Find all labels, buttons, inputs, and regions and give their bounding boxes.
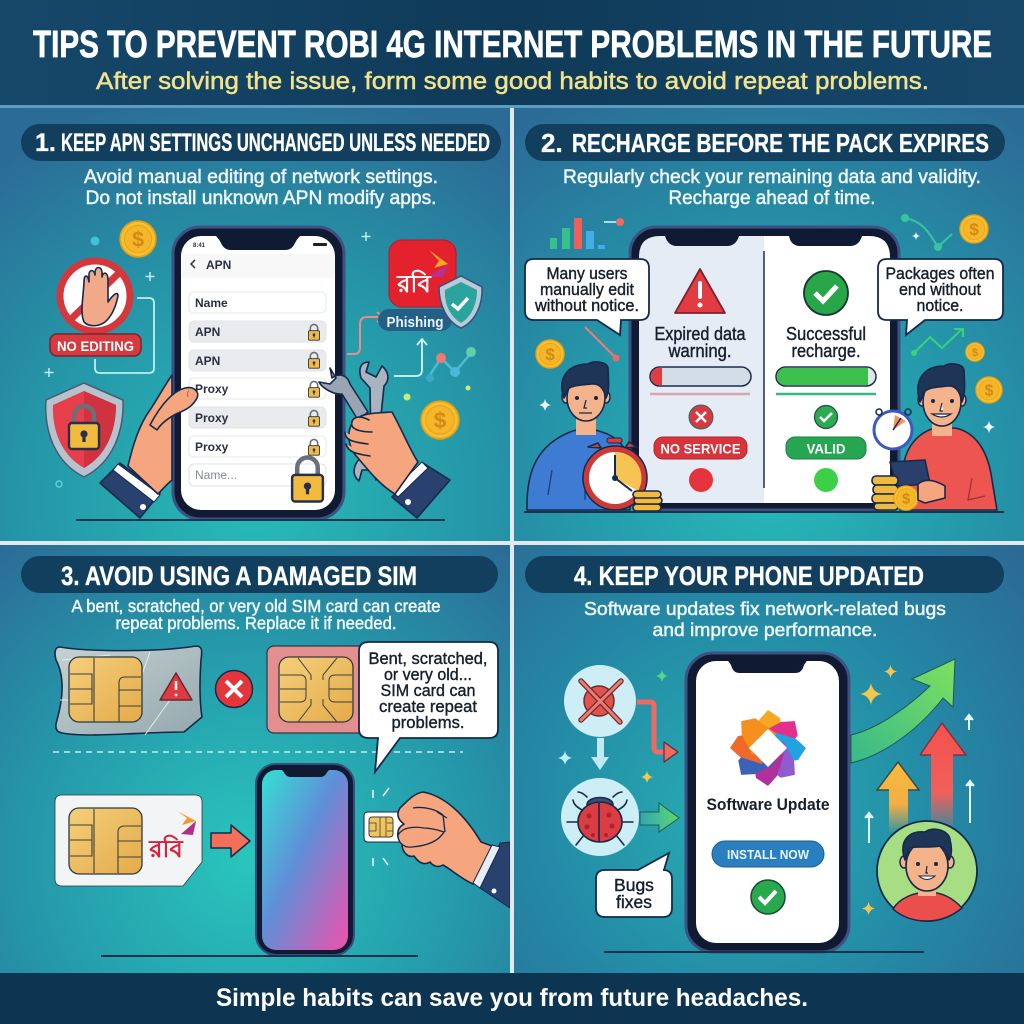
mini line chart [394,339,476,382]
icon: no editing hand [60,261,130,331]
description 3: A bent, scratched, or very old SIM card can create [72,596,440,616]
speech bubble left: without notice. [534,297,639,315]
icon: Robi app [389,240,456,307]
hand on tablet [918,480,945,503]
warning state [650,269,751,492]
success state: recharge. [792,341,860,361]
person left [527,362,630,510]
insertion ticks [373,788,389,866]
description 4: Software updates fix network-related bugs [584,598,946,619]
settings rows: Proxy [195,411,229,425]
icon: Robi app: রবি [396,269,432,298]
warning state: Expired data [654,324,746,344]
speech bubble left: Many users [546,265,628,283]
label: phishing: Phishing [386,314,444,331]
phone 3 [256,764,354,955]
new Robi SIM card: রবি [148,834,184,863]
coin [960,215,988,243]
coin [976,377,1002,403]
phone 2 [630,227,899,510]
speech bubble: bugs fixes: fixes [616,892,652,912]
worn SIM card [267,646,367,733]
warning state: warning. [668,341,732,361]
phone 1: 8:41 [193,243,206,249]
decorative dots and sparkles [44,232,470,487]
line chart top right [901,214,952,251]
base line [524,511,1004,513]
panel 1: keep APN settings [0,108,510,542]
badge: no editing [50,334,141,356]
speech bubble right: end without [899,281,981,299]
green arrow [640,803,679,832]
coin [536,340,564,368]
speech bubble left: manually edit [540,281,634,299]
base line [101,955,418,957]
sparkles [558,665,897,915]
subtitle: After solving the issue, form some good habits to avoid repeat problems. [96,68,929,95]
icon: coin top [120,221,156,257]
panel 4: keep phone updated [514,545,1024,973]
mini bar chart [550,218,624,249]
wrenches [319,362,388,481]
sparkles [539,232,995,433]
speech bubble: create repeat [379,697,477,716]
heading 4: 4. KEEP YOUR PHONE UPDATED [574,561,924,591]
description 4 [584,598,946,640]
speech bubble left [525,259,649,335]
speech bubble: problems. [392,713,464,732]
success state [776,271,876,492]
stopwatch [874,409,912,449]
header banner [0,0,1024,108]
description 4: and improve performance. [652,619,878,640]
install button [712,841,824,867]
heading 1 [21,124,501,161]
arrow down [591,738,609,770]
speech bubble: SIM card can [380,681,476,700]
install button: INSTALL NOW [727,847,810,862]
label: phishing [378,309,452,331]
left hand holding phone [100,375,198,518]
icon: red shield lock [46,383,123,477]
icon: red cross [216,670,252,708]
settings rows: Name... [195,468,237,482]
avatar [877,821,977,921]
new Robi SIM card [55,795,202,886]
description 1 [84,167,438,209]
description 2: Regularly check your remaining data and validity. [563,167,981,188]
SIM held in hand [364,792,510,908]
panel 3: avoid damaged SIM [0,545,510,973]
red connector arrow [637,702,678,762]
coin front [894,486,918,510]
crossed bug icon [564,665,636,737]
description 2: Recharge ahead of time. [668,188,876,209]
heading 3: 3. AVOID USING A DAMAGED SIM [61,561,417,591]
settings rows: APN [195,354,220,368]
description 3 [72,596,440,633]
settings rows: Proxy [195,382,229,396]
yellow up arrow [877,762,919,832]
description 3: repeat problems. Replace it if needed. [116,613,396,633]
tablet [890,460,930,486]
speech bubble: bugs fixes [596,853,672,917]
success state: VALID [806,440,846,456]
warning state: NO SERVICE [660,440,740,456]
base line [604,951,924,953]
damaged SIM card [55,646,202,735]
phone 4 [686,653,849,952]
success state: Successful [786,324,866,344]
phone 1 [173,227,344,519]
right hand with wrench [345,412,450,518]
heading 1: 1. [35,129,56,157]
APN title: APN [206,258,231,272]
decorative trend lines [585,327,963,362]
description 1: Avoid manual editing of network settings. [84,167,438,188]
icon: teal shield check [439,276,482,328]
speech bubble: bugs fixes: Bugs [614,875,654,895]
coin stack right [872,476,898,510]
panel 2: recharge before expiry [514,108,1024,542]
update logo [730,710,806,786]
software update label: Software Update [706,795,830,814]
speech bubble right: Packages often [886,265,994,283]
red up arrow [920,723,966,830]
small white up arrows [865,715,974,843]
speech bubble [359,642,498,772]
speech bubble right: notice. [916,297,964,315]
description 2 [563,167,981,209]
footer banner [0,973,1024,1024]
insert arrow [211,825,250,857]
settings rows: APN [195,325,220,339]
person right [900,364,997,510]
check icon [751,880,785,914]
icon: big padlock [292,457,323,502]
badge: no editing: NO EDITING [57,338,134,354]
connector line [95,298,154,373]
speech bubble: or very old... [384,665,472,684]
connector arrow to logo [347,312,383,354]
footer text: Simple habits can save you from future headaches. [216,984,808,1012]
speech bubble: Bent, scratched, [368,649,488,668]
alarm clock [583,438,647,510]
settings rows: Name [195,296,228,310]
base line [76,519,445,521]
speech bubble right [878,259,1003,335]
coins stack [633,491,662,511]
heading 1: KEEP APN SETTINGS UNCHANGED UNLESS NEEDED [61,129,490,157]
coin [966,343,984,361]
ladybug icon [561,778,639,856]
big green arrow [851,659,955,763]
heading 2: 2. [541,128,563,158]
settings rows: Proxy [195,440,229,454]
dashed divider [53,751,463,753]
description 1: Do not install unknown APN modify apps. [86,188,437,209]
settings rows [189,292,326,486]
icon: coin right [421,401,459,439]
